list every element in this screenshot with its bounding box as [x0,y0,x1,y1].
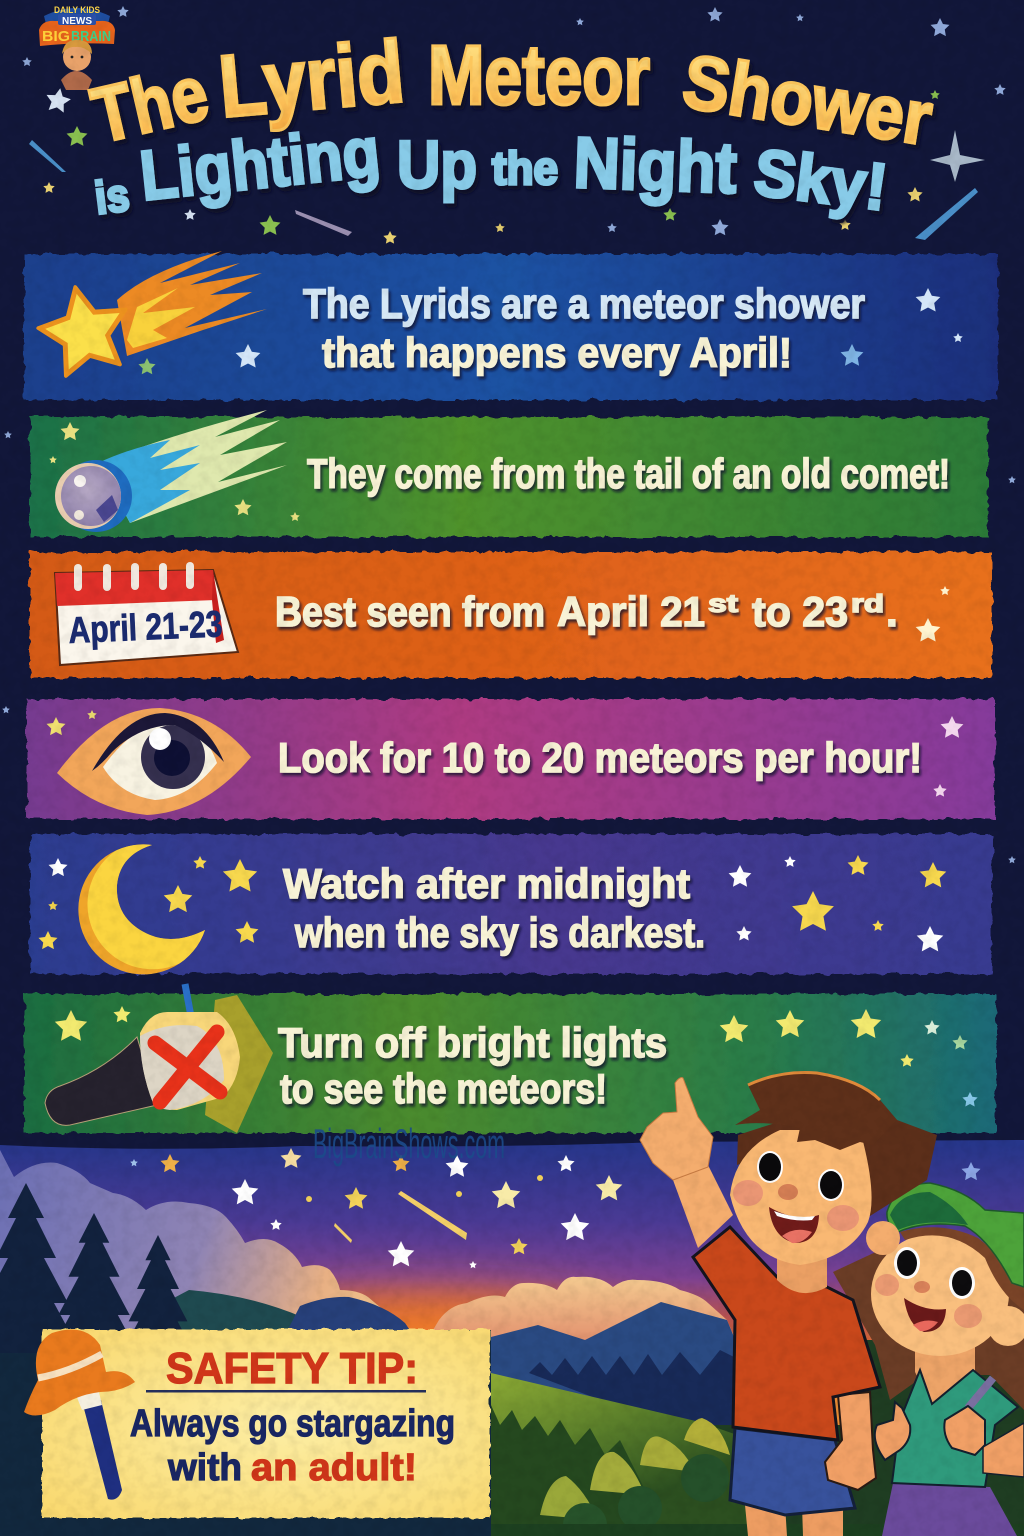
girl face [871,1232,1009,1356]
text: watch after midnight [283,860,705,956]
panel: meteors per hour [27,699,995,819]
dark treeline on hill [491,1405,650,1536]
girl arm [983,1423,1024,1477]
text: annual April meteor shower: that happens every April! [322,329,792,376]
boy raised arm [673,1165,733,1248]
stars decoration [46,710,963,797]
icon: calendar [55,562,238,665]
ground right [700,1340,1024,1536]
title line 1: Meteor [428,28,650,122]
girl hands [875,1402,910,1460]
scene: night landscape [0,1140,1024,1536]
title line 1: Lyrid [215,21,408,136]
panel: source comet [30,410,988,537]
boy nose [778,1184,798,1200]
boy cheeks [733,1180,763,1206]
boy shorts [730,1428,855,1515]
trees left [0,1183,196,1358]
logo: Daily Kids News Big Brain [39,5,115,90]
text: annual April meteor shower [303,280,865,376]
text: best seen dates [275,588,898,635]
text: best seen dates: st [708,590,739,618]
boy hair fringe [735,1072,897,1150]
icon: crescent moon [78,844,205,974]
girl neck [915,1345,975,1406]
girl skirt [882,1483,1017,1536]
text: go with an adult: with [167,1447,242,1489]
background stars [2,6,1016,863]
watermark: BigBrainShows.com [313,1120,505,1167]
text: turn off bright lights: Turn off bright lights [278,1019,667,1066]
text: annual April meteor shower: The Lyrids are a meteor shower [303,280,865,327]
text: watch after midnight: when the sky is darkest. [294,909,705,956]
logo: Daily Kids News Big Brain: NEWS [62,16,92,27]
panel: after midnight [30,830,992,974]
bushes [491,1418,1024,1536]
boy ear [866,1221,900,1255]
icon: explorer hat and flashlight [24,1329,135,1500]
girl cap [887,1183,1024,1287]
stars decoration [49,422,300,521]
girl [833,1183,1024,1536]
title [84,21,938,224]
boy hair back [737,1100,937,1216]
safety tip box [24,1329,490,1518]
boy shirt [693,1227,880,1440]
text: go with an adult [130,1403,455,1489]
mountains [470,1302,760,1440]
title line 2: is [92,168,132,224]
title line 1: The [84,48,216,160]
icon: flashlight crossed out [45,984,273,1133]
girl hair back [833,1250,1024,1410]
title line 1 [84,21,938,162]
distant hills [170,1290,320,1350]
text: best seen dates: to 23 [752,588,848,635]
title line 2: the [492,142,558,194]
text: best seen dates: April 21 [557,588,705,635]
boy right arm [825,1392,876,1490]
panel: best dates [30,552,992,678]
stars decoration [916,586,950,642]
green hill [491,1373,780,1536]
girl shirt [892,1370,1018,1487]
icon: shooting star [32,251,267,379]
heading: safety tip: SAFETY TIP: [166,1344,418,1393]
title line 2: Up [397,127,477,203]
boy legs [745,1505,843,1536]
clouds right [430,1277,740,1350]
stars decoration [138,288,963,374]
boy head [730,1130,872,1265]
upper right stars over sky [961,1162,1004,1218]
icon: comet [55,410,287,532]
text: best seen dates: Best seen from [275,588,545,635]
clouds left [0,1150,400,1360]
ground left [0,1330,491,1536]
logo: Daily Kids News Big Brain: DAILY KIDS [54,5,100,15]
text: turn off bright lights [278,1019,667,1112]
title line 2 [92,112,891,224]
text: best seen dates: rd [851,590,884,618]
icon: calendar: April 21-23 [68,603,223,651]
stars [130,1148,622,1268]
stars decoration [38,855,946,951]
boy [640,1072,937,1536]
text: 10 to 20 per hour: Look for 10 to 20 meteors per hour! [278,734,922,781]
logo: Daily Kids News Big Brain: BIG [42,28,70,45]
title line 1: Shower [677,39,938,162]
text: watch after midnight: Watch after midnight [283,860,690,907]
title line 2: Lighting [136,112,383,215]
stars decoration [55,1006,978,1106]
boy hand [640,1078,713,1180]
boy mouth [769,1207,819,1243]
text: turn off bright lights: to see the meteors! [280,1065,607,1112]
text: go with an adult: Always go stargazing [130,1403,455,1445]
girl hair fringe [900,1227,1024,1310]
panel: bright lights off [24,984,996,1133]
boy eyes [757,1151,783,1183]
text: best seen dates: . [886,588,898,635]
logo: Daily Kids News Big Brain: BRAIN [71,28,111,45]
sky [0,1140,1024,1536]
title line 2: Sky! [750,134,891,224]
text: go with an adult: an adult! [251,1447,417,1489]
boy neck [777,1255,827,1293]
title line 2: Night [572,123,738,209]
panel: what the Lyrids are [24,251,998,400]
icon: eye [57,708,251,815]
